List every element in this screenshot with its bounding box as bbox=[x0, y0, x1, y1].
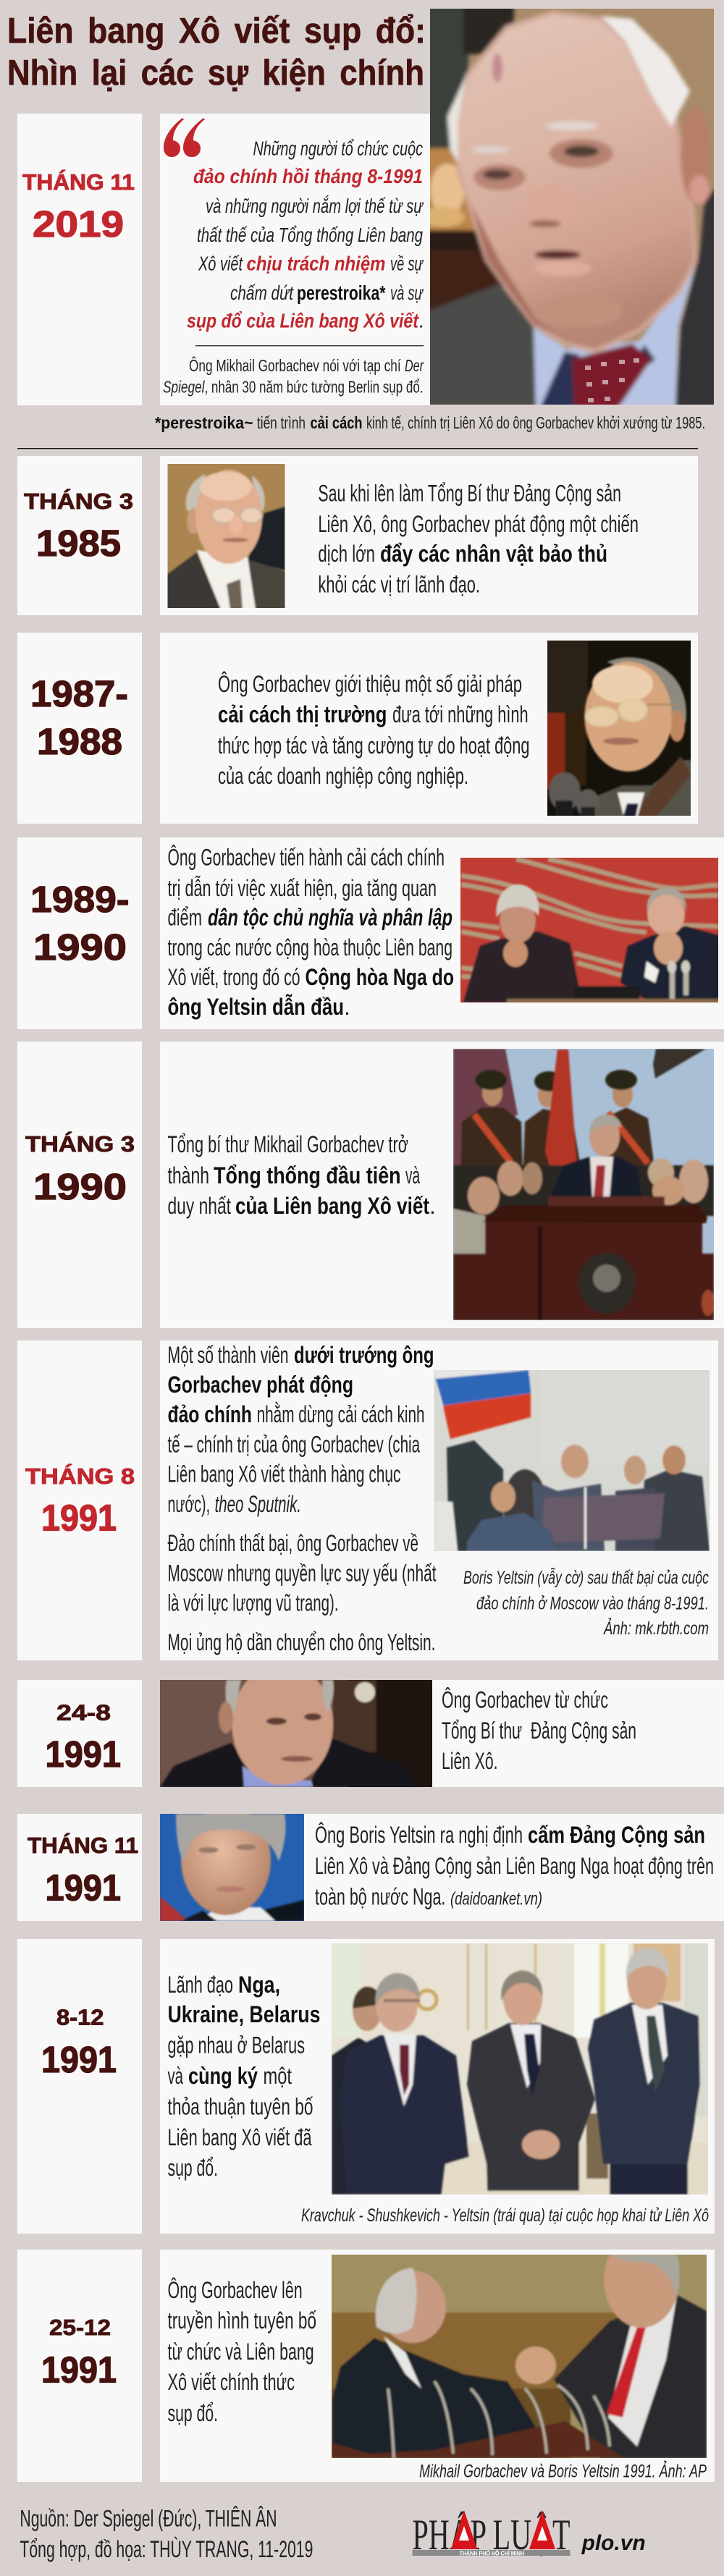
photo: Gorbachev with microphones bbox=[547, 641, 691, 816]
date panel: 8-12 1991: 8-12 bbox=[56, 2005, 104, 2030]
text block 25 December 1991: sụp đổ. bbox=[168, 2400, 218, 2426]
text block 1987-1988: Ông Gorbachev giới thiệu một số giải pháp bbox=[218, 671, 522, 697]
text block August 1991: Liên bang Xô viết thành hàng chục bbox=[168, 1461, 401, 1487]
panel: event August 1991 bbox=[160, 1340, 718, 1660]
source credits: Tổng hợp, đồ họa: THÙY TRANG, 11-2019 bbox=[20, 2536, 313, 2562]
photo: Yeltsin and Gorbachev at congress bbox=[460, 858, 718, 1002]
date panel: tháng 3 1990: 1990 bbox=[33, 1166, 127, 1207]
panel: event 25 December 1991 bbox=[160, 2232, 715, 2482]
quote attribution: Der bbox=[405, 356, 424, 375]
text block 1987-1988: đưa tới những hình bbox=[392, 701, 529, 727]
quote text: đảo chính hồi tháng 8-1991 bbox=[193, 165, 423, 187]
text block 25 December 1991: từ chức và Liên bang bbox=[168, 2339, 314, 2365]
text block 25 December 1991: Ông Gorbachev lên bbox=[168, 2277, 303, 2303]
photo: Gorbachev portrait bbox=[430, 9, 714, 405]
date panel: 8-12 1991 bbox=[17, 1939, 142, 2234]
text block March 1990: . bbox=[429, 1193, 436, 1219]
panel: event 1985 bbox=[160, 456, 698, 615]
text block 8 December 1991: Nga, bbox=[238, 1972, 280, 1998]
date panel: tháng 3 1985: THÁNG 3 bbox=[24, 489, 133, 514]
date panel: 25-12 1991: 25-12 bbox=[49, 2315, 111, 2340]
panel: event March 1990 bbox=[160, 1042, 724, 1328]
date panel: 24-8 1991: 24-8 bbox=[56, 1699, 111, 1726]
date panel: tháng 3 1985: 1985 bbox=[36, 523, 121, 564]
title bbox=[7, 12, 426, 93]
text block 1989-1990: Ông Gorbachev tiến hành cải cách chính bbox=[168, 844, 445, 870]
text block 1987-1988 bbox=[218, 671, 530, 789]
text block 1989-1990: điểm bbox=[168, 905, 202, 931]
photo: Gorbachev at podium bbox=[453, 1049, 714, 1320]
title: Liên bang Xô viết sụp đổ: bbox=[7, 12, 426, 51]
text block August 1991: tế – chính trị của ông Gorbachev (chia bbox=[168, 1432, 420, 1458]
text block 1985: đẩy các nhân vật bảo thủ bbox=[380, 541, 607, 567]
panel: event 1989-1990 bbox=[160, 837, 724, 1029]
text block 8 December 1991: và bbox=[168, 2063, 183, 2089]
date panel: 1989-1990: 1990 bbox=[33, 926, 127, 968]
panel: event 1987-1988 bbox=[160, 633, 698, 824]
text block November 1991: (daidoanket.vn) bbox=[450, 1889, 542, 1909]
date panel: tháng 8 1991: 1991 bbox=[41, 1498, 117, 1539]
quote text: thất thế của Tổng thống Liên bang bbox=[197, 224, 423, 246]
text block November 1991: toàn bộ nước Nga. bbox=[315, 1884, 445, 1910]
photo: Yeltsin portrait bbox=[160, 1814, 304, 1921]
date panel: 24-8 1991 bbox=[17, 1680, 142, 1787]
panel: event November 1991 bbox=[160, 1805, 724, 1921]
quote text: chấm dứt bbox=[230, 282, 294, 304]
date panel: tháng 3 1990: THÁNG 3 bbox=[25, 1131, 135, 1157]
text block 8 December 1991: gặp nhau ở Belarus bbox=[168, 2032, 305, 2058]
text block August 1991: theo Sputnik. bbox=[215, 1491, 301, 1517]
text block 1987-1988: thức hợp tác và tăng cường tự do hoạt động bbox=[218, 732, 530, 759]
text block August 1991: Một số thành viên bbox=[168, 1342, 288, 1368]
photo caption: Yeltsin flag bbox=[463, 1567, 709, 1639]
quote text: . bbox=[419, 310, 425, 332]
date panel: tháng 11 2019 bbox=[17, 114, 142, 405]
quote text: sụp đổ của Liên bang Xô viết bbox=[187, 310, 419, 332]
text block 1985 bbox=[318, 481, 639, 598]
date panel: tháng 11 1991 bbox=[17, 1814, 142, 1921]
date panel: 25-12 1991: 1991 bbox=[41, 2349, 117, 2391]
date panel: 1987-1988: 1987- bbox=[30, 673, 128, 714]
text block 24 August 1991: Liên Xô. bbox=[442, 1748, 498, 1774]
panel: quote from Gorbachev bbox=[160, 114, 430, 405]
text block 8 December 1991: một bbox=[264, 2063, 292, 2089]
text block 8 December 1991: sụp đổ. bbox=[168, 2155, 218, 2181]
text block August 1991: nhằm dừng cải cách kinh bbox=[257, 1401, 425, 1427]
text block 1987-1988: cải cách thị trường bbox=[218, 701, 387, 727]
date panel: 25-12 1991 bbox=[17, 2250, 142, 2482]
text block 24 August 1991 bbox=[442, 1687, 636, 1774]
text block November 1991: Ông Boris Yeltsin ra nghị định bbox=[315, 1822, 523, 1848]
footnote: perestroika: tiến trình bbox=[257, 413, 306, 432]
panel: event 8 December 1991 bbox=[160, 1939, 715, 2234]
text block March 1990: Tổng bí thư Mikhail Gorbachev trở bbox=[168, 1131, 408, 1157]
quote text: chịu trách nhiệm bbox=[246, 253, 385, 275]
quote text: perestroika* bbox=[297, 282, 386, 304]
footnote: perestroika bbox=[155, 413, 705, 432]
text block August 1991: Moscow nhưng quyền lực suy yếu (nhất bbox=[168, 1561, 437, 1587]
text block 1987-1988: của các doanh nghiệp công nghiệp. bbox=[218, 763, 468, 789]
source credits bbox=[20, 2506, 313, 2562]
text block March 1990: duy nhất bbox=[168, 1193, 231, 1219]
title: Nhìn lại các sự kiện chính bbox=[7, 54, 424, 93]
text block 25 December 1991: Xô viết chính thức bbox=[168, 2369, 295, 2395]
text block 1989-1990: trị dẫn tới việc xuất hiện, gia tăng quan bbox=[168, 875, 437, 901]
text block 1989-1990: Cộng hòa Nga do bbox=[306, 964, 454, 990]
text block August 1991: Mọi ủng hộ dần chuyển cho ông Yeltsin. bbox=[168, 1629, 436, 1655]
website: plo.vn: plo.vn bbox=[581, 2531, 646, 2555]
text block March 1990: thành bbox=[168, 1162, 209, 1188]
quote attribution: Spiegel bbox=[163, 378, 205, 397]
quote text: và những người nắm lợi thế từ sự bbox=[206, 195, 424, 217]
logo: Pháp Luật bbox=[413, 2510, 571, 2559]
date panel: tháng 11 2019: 2019 bbox=[33, 203, 124, 245]
text block August 1991: đảo chính bbox=[168, 1401, 252, 1427]
text block 25 December 1991: truyền hình tuyên bố bbox=[168, 2307, 316, 2334]
logo: Pháp Luật: THÀNH PHỐ HỒ CHÍ MINH bbox=[460, 2549, 524, 2556]
date panel: tháng 3 1985 bbox=[17, 456, 142, 615]
text block 24 August 1991: Ông Gorbachev từ chức bbox=[442, 1687, 608, 1713]
text block 1989-1990: ông Yeltsin dẫn đầu bbox=[168, 994, 344, 1020]
text block August 1991: Gorbachev phát động bbox=[168, 1372, 353, 1398]
text block 1989-1990: dân tộc chủ nghĩa và phân lập bbox=[208, 905, 452, 931]
text block 25 December 1991 bbox=[168, 2277, 316, 2426]
text block August 1991: là với lực lượng vũ trang). bbox=[168, 1589, 339, 1616]
quote text: và sự bbox=[390, 282, 424, 304]
text block August 1991 bbox=[168, 1342, 437, 1655]
photo: Gorbachev 1985 bbox=[168, 464, 285, 608]
text block March 1990: và bbox=[405, 1162, 420, 1188]
date panel: 1987-1988 bbox=[17, 633, 142, 824]
text block 1989-1990: Xô viết, trong đó có bbox=[168, 964, 300, 990]
date panel: 8-12 1991: 1991 bbox=[41, 2039, 117, 2080]
text block 1989-1990: . bbox=[344, 994, 350, 1020]
quote text: Xô viết bbox=[198, 253, 243, 275]
text block 8 December 1991: Liên bang Xô viết đã bbox=[168, 2124, 312, 2150]
date panel: tháng 11 1991: THÁNG 11 bbox=[28, 1833, 138, 1858]
date panel: 24-8 1991: 1991 bbox=[45, 1733, 121, 1775]
photo: Gorbachev and Yeltsin at microphones bbox=[332, 2255, 707, 2458]
date panel: 1989-1990 bbox=[17, 837, 142, 1029]
quote text: Những người tổ chức cuộc bbox=[253, 138, 423, 160]
text block March 1990: Tổng thống đầu tiên bbox=[214, 1162, 401, 1188]
text block March 1990: của Liên bang Xô viết bbox=[235, 1193, 429, 1219]
text block 1985: dịch lớn bbox=[318, 541, 375, 567]
text block August 1991: nước), bbox=[168, 1491, 210, 1517]
text block 1989-1990: trong các nước cộng hòa thuộc Liên bang bbox=[168, 934, 452, 960]
date panel: tháng 11 2019: THÁNG 11 bbox=[22, 169, 135, 195]
footnote: perestroika: cải cách bbox=[310, 413, 362, 432]
quote attribution: Ông Mikhail Gorbachev nói với tạp chí bbox=[189, 355, 401, 375]
text block 8 December 1991: cùng ký bbox=[188, 2063, 258, 2089]
text block August 1991: dưới trướng ông bbox=[294, 1342, 434, 1368]
text block November 1991 bbox=[315, 1822, 714, 1910]
date panel: tháng 8 1991 bbox=[17, 1340, 142, 1660]
text block March 1990 bbox=[168, 1131, 436, 1219]
date panel: tháng 11 1991: 1991 bbox=[45, 1867, 121, 1908]
text block 1985: khỏi các vị trí lãnh đạo. bbox=[318, 572, 480, 598]
text block 8 December 1991: Lãnh đạo bbox=[168, 1972, 233, 1998]
text block August 1991: Đảo chính thất bại, ông Gorbachev về bbox=[168, 1530, 418, 1556]
quote text: về sự bbox=[390, 253, 424, 275]
source credits: Nguồn: Der Spiegel (Đức), THIÊN ÂN bbox=[20, 2506, 277, 2532]
text block 8 December 1991 bbox=[168, 1972, 320, 2181]
date panel: tháng 8 1991: THÁNG 8 bbox=[25, 1464, 135, 1489]
logo: Pháp Luật: PHÁP LUẬT bbox=[413, 2511, 571, 2559]
photo: Yeltsin waving flag bbox=[434, 1370, 710, 1551]
date panel: 1989-1990: 1989- bbox=[30, 879, 130, 920]
quote attribution: , nhân 30 năm bức tường Berlin sụp đổ. bbox=[204, 378, 423, 397]
text block 8 December 1991: thỏa thuận tuyên bố bbox=[168, 2093, 313, 2119]
date panel: tháng 3 1990 bbox=[17, 1042, 142, 1328]
photo: three leaders bbox=[332, 1943, 708, 2195]
date panel: 1987-1988: 1988 bbox=[37, 721, 122, 762]
text block 8 December 1991: Ukraine, Belarus bbox=[168, 2001, 320, 2027]
footnote: perestroika: *perestroika~ bbox=[155, 413, 253, 432]
quote attribution bbox=[163, 355, 424, 397]
photo: Gorbachev close-up bbox=[160, 1680, 432, 1787]
text block 1989-1990 bbox=[168, 844, 454, 1020]
panel: event 24 August 1991 bbox=[160, 1663, 724, 1787]
icon: quotation mark bbox=[164, 118, 205, 157]
quote text bbox=[187, 138, 425, 332]
